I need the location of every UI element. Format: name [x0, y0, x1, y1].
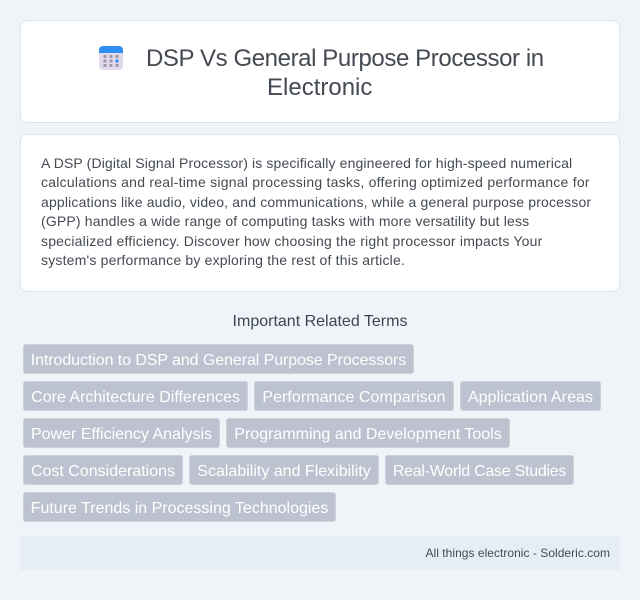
icon: calendar grid [99, 46, 123, 70]
title: Electronic [267, 74, 372, 101]
tag [23, 418, 220, 448]
description text: A DSP (Digital Signal Processor) is specifically engineered for high-speed numerical [41, 155, 572, 171]
description text: system's performance by exploring the rest of this article. [41, 252, 405, 268]
tag: Cost Considerations [31, 463, 175, 480]
tag [226, 418, 510, 448]
tag: Programming and Development Tools [234, 426, 502, 443]
tag: Application Areas [468, 389, 593, 406]
tag [189, 455, 379, 485]
tag [23, 492, 336, 522]
title: DSP Vs General Purpose Processor in [146, 45, 544, 72]
description text [41, 155, 591, 268]
tag [385, 455, 574, 485]
tag [460, 381, 601, 411]
tag: Real-World Case Studies [393, 463, 566, 480]
description text: calculations and real-time signal processing tasks, offering optimized performance for [41, 174, 590, 190]
description text: specialized efficiency. Discover how choosing the right processor impacts Your [41, 233, 542, 249]
tag [23, 381, 248, 411]
title [146, 45, 544, 101]
tag: Introduction to DSP and General Purpose Processors [31, 352, 406, 369]
tag: Core Architecture Differences [31, 389, 240, 406]
footer [20, 536, 620, 570]
tag [254, 381, 454, 411]
heading: important related terms: Important Related Terms [233, 313, 407, 330]
tag: Future Trends in Processing Technologies [31, 500, 328, 517]
tag [23, 455, 183, 485]
tag [23, 344, 414, 374]
tag list [23, 344, 601, 522]
tag: Performance Comparison [262, 389, 446, 406]
description text: (GPP) handles a wide range of computing tasks with more versatility but less [41, 213, 529, 229]
tag: Scalability and Flexibility [197, 463, 371, 480]
footer: All things electronic - Solderic.com [426, 546, 610, 560]
panel: title card [20, 20, 620, 123]
panel: description [20, 134, 620, 292]
description text: applications like audio, video, and communications, while a general purpose processor [41, 194, 591, 210]
tag: Power Efficiency Analysis [31, 426, 212, 443]
